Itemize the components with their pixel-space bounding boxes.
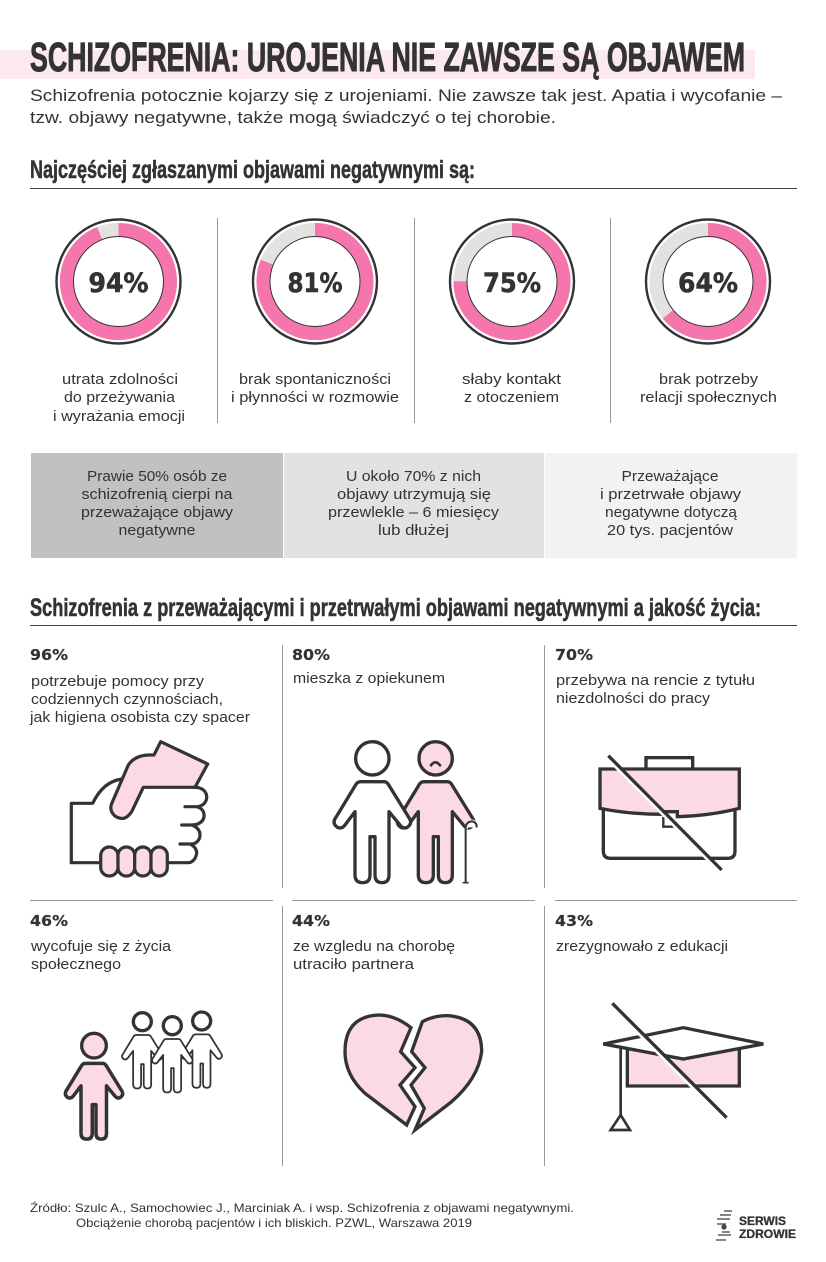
- label: 81%: brak spontaniczności: [239, 371, 391, 388]
- panel: 70% chronic: [284, 453, 544, 558]
- panel: 50% of patients: schizofrenią cierpi na: [82, 486, 233, 503]
- label: 81%: i płynności w rozmowie: [231, 389, 399, 406]
- panel: 70% chronic: przewlekle – 6 miesięcy: [328, 504, 500, 521]
- stat: 80%: mieszka z opiekunem: [293, 670, 445, 687]
- stat: 70%: [555, 646, 755, 707]
- stat: 46%: wycofuje się z życia: [30, 938, 172, 955]
- logo: Serwis Zdrowie: [716, 1211, 796, 1241]
- panel: 20 thousand patients: Przeważające: [622, 468, 718, 485]
- stat: 80%: 80%: [292, 646, 330, 664]
- icon: helping hand: [71, 742, 208, 876]
- label: 75%: z otoczeniem: [464, 389, 559, 406]
- donut chart: 94%: [56, 220, 180, 344]
- panel: 20 thousand patients: [545, 453, 797, 558]
- stat: 44%: ze wzgledu na chorobę: [293, 938, 455, 955]
- icon: person withdrawn from group: [65, 1012, 222, 1139]
- stat: 96%: jak higiena osobista czy spacer: [29, 709, 250, 726]
- icon: graduation cap crossed out: [603, 1003, 763, 1130]
- donut chart: 81%: 81%: [288, 268, 342, 299]
- stat: 70%: niezdolności do pracy: [556, 690, 711, 707]
- panel: 50% of patients: [31, 453, 283, 558]
- panel: 20 thousand patients: 20 tys. pacjentów: [607, 522, 733, 539]
- icon: broken heart: [345, 1015, 482, 1130]
- stat: 70%: 70%: [555, 646, 593, 664]
- intro text: [30, 86, 783, 127]
- icon: briefcase crossed out: [600, 756, 739, 872]
- label: 75%: słaby kontakt: [462, 371, 562, 388]
- stat: 70%: przebywa na rencie z tytułu: [556, 672, 755, 689]
- stat: 43%: 43%: [555, 912, 593, 930]
- stat: 46%: społecznego: [31, 956, 121, 973]
- label: 64%: relacji społecznych: [640, 389, 777, 406]
- intro text: Schizofrenia potocznie kojarzy się z urojeniami. Nie zawsze tak jest. Apatia i wycofanie –: [30, 86, 783, 105]
- stat: 96%: codziennych czynnościach,: [31, 691, 223, 708]
- stat: 44%: 44%: [292, 912, 330, 930]
- logo: Serwis Zdrowie: ZDROWIE: [739, 1227, 796, 1241]
- stat: 43%: zrezygnowało z edukacji: [556, 938, 728, 955]
- panel: 50% of patients: przeważające objawy: [81, 504, 234, 521]
- label: 94%: utrata zdolności: [62, 371, 178, 388]
- panel: 50% of patients: negatywne: [118, 522, 196, 539]
- heading: negative symptoms: Najczęściej zgłaszanymi objawami negatywnymi są:: [30, 156, 475, 184]
- panel: 70% chronic: lub dłużej: [378, 522, 449, 539]
- stat: 96%: potrzebuje pomocy przy: [31, 673, 205, 690]
- logo: Serwis Zdrowie: SERWIS: [739, 1214, 786, 1228]
- label: 75%: [462, 371, 562, 406]
- panel: 50% of patients: Prawie 50% osób ze: [87, 468, 227, 485]
- panel: 70% chronic: objawy utrzymują się: [337, 486, 491, 503]
- donut chart: 81%: [253, 220, 377, 344]
- label: 64%: [640, 371, 777, 406]
- stat: 46%: 46%: [30, 912, 68, 930]
- label: 94%: do przeżywania: [64, 389, 176, 406]
- icon: patient with caregiver: [334, 742, 477, 883]
- source note: [30, 1200, 574, 1230]
- donut chart: 64%: [646, 220, 770, 344]
- donut chart: 75%: 75%: [483, 268, 541, 299]
- stat: 44%: [292, 912, 455, 973]
- donut chart: 94%: 94%: [88, 268, 148, 299]
- panel: 20 thousand patients: negatywne dotyczą: [605, 504, 738, 521]
- donut chart: 75%: [450, 220, 574, 344]
- intro text: tzw. objawy negatywne, także mogą świadczyć o tej chorobie.: [30, 108, 556, 127]
- source note: Obciążenie chorobą pacjentów i ich bliskich. PZWL, Warszawa 2019: [76, 1216, 472, 1230]
- panel: 20 thousand patients: i przetrwałe objawy: [600, 486, 742, 503]
- title highlight band: [0, 50, 755, 79]
- label: 94%: i wyrażania emocji: [53, 408, 185, 425]
- stat: 96%: 96%: [30, 646, 68, 664]
- source note: Źródło: Szulc A., Samochowiec J., Marciniak A. i wsp. Schizofrenia z objawami negatywnymi.: [30, 1200, 574, 1215]
- label: 64%: brak potrzeby: [659, 371, 759, 388]
- donut chart: 64%: 64%: [678, 268, 738, 299]
- label: 94%: [53, 371, 185, 425]
- stat: 44%: utraciło partnera: [293, 956, 415, 973]
- stat: 46%: [30, 912, 172, 973]
- stat: 43%: [555, 912, 728, 955]
- panel: 70% chronic: U około 70% z nich: [346, 468, 481, 485]
- stat: 96%: [29, 646, 250, 726]
- label: 81%: [231, 371, 399, 406]
- stat: 80%: [292, 646, 445, 687]
